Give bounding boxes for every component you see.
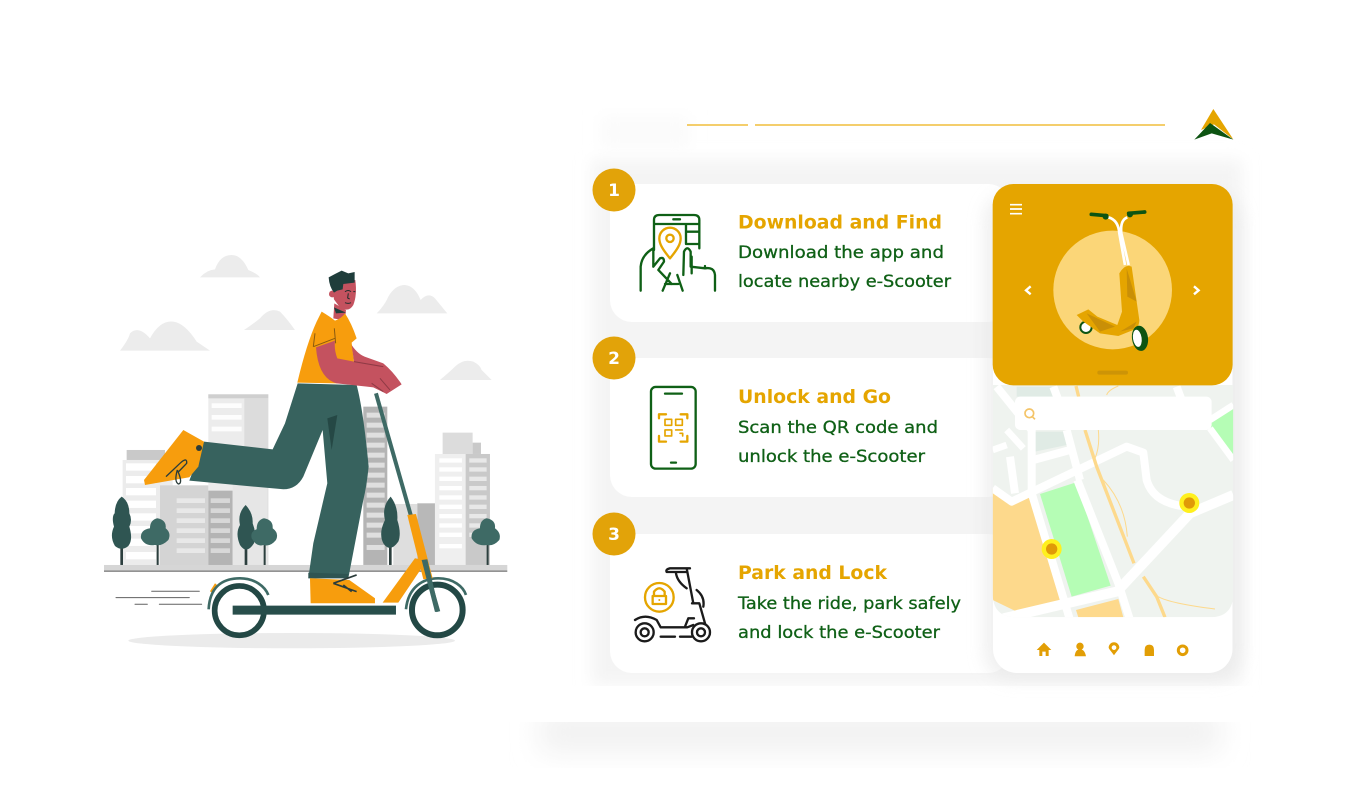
clouds: [120, 255, 492, 380]
card text: [738, 212, 951, 292]
number badge: [592, 168, 636, 212]
card text: and lock the e-Scooter: [738, 623, 940, 643]
header rule: [687, 124, 1165, 126]
soft background shadows: [492, 115, 1252, 752]
hair: [329, 271, 355, 293]
map pin: [1179, 493, 1199, 513]
illustration: man riding e-scooter through city: [104, 255, 507, 648]
number badge: 1: [608, 181, 620, 201]
icon: location: [1109, 642, 1119, 655]
step card 3: park and lock: [592, 512, 1010, 673]
icon: search: [1025, 409, 1035, 419]
product circle: [1053, 231, 1172, 349]
bottom navigation icons: [1037, 642, 1187, 656]
logo: [1194, 109, 1233, 140]
trees: [112, 497, 500, 565]
step card 1: download and find: [592, 168, 1010, 322]
speed lines: [116, 591, 202, 604]
card: [610, 534, 1010, 673]
map pin: [1042, 539, 1062, 559]
icon: phone with QR code: [651, 387, 696, 469]
man: [144, 271, 402, 603]
scooter product image: [1077, 211, 1150, 352]
card text: Take the ride, park safely: [737, 594, 961, 614]
phone mockup: [993, 184, 1233, 673]
ground shadow: [128, 633, 455, 648]
number badge: [592, 336, 636, 380]
card text: Download the app and: [738, 243, 944, 263]
city buildings: [123, 394, 490, 567]
arms: [316, 341, 402, 394]
map: [993, 385, 1233, 656]
card text: Unlock and Go: [738, 386, 891, 408]
number badge: 3: [608, 525, 620, 545]
card text: unlock the e-Scooter: [738, 447, 925, 467]
icon: menu: [1010, 205, 1022, 214]
card text: [738, 386, 938, 467]
card text: Park and Lock: [738, 562, 887, 584]
icon: parked scooter with padlock: [635, 568, 710, 641]
trouser legs: [189, 383, 369, 578]
shirt: [297, 312, 357, 383]
card: [610, 358, 1010, 497]
search bar: [1015, 397, 1212, 430]
icon: settings: [1178, 646, 1187, 655]
icon: hand tapping location on phone: [641, 215, 715, 291]
carousel arrows: [1026, 286, 1199, 294]
card text: [737, 562, 961, 643]
icon: user: [1075, 643, 1086, 656]
neck and head: [333, 303, 346, 321]
card: [610, 184, 1010, 322]
scooter: [209, 393, 466, 635]
front shoe: [310, 578, 375, 603]
phone body: [993, 184, 1232, 673]
number badge: [592, 512, 636, 556]
step card 2: unlock and go: [592, 336, 1010, 497]
yellow header panel: [993, 184, 1233, 385]
ground strip: [104, 565, 507, 572]
icon: bell: [1145, 645, 1154, 656]
drag handle: [1097, 371, 1128, 375]
crotch shade: [327, 415, 337, 450]
card text: Scan the QR code and: [738, 418, 938, 438]
phone shadow: [984, 192, 1242, 680]
rear shoe: [144, 430, 204, 485]
card text: locate nearby e-Scooter: [738, 272, 951, 292]
icon: home: [1037, 643, 1051, 656]
card text: Download and Find: [738, 212, 942, 234]
number badge: 2: [608, 349, 620, 369]
